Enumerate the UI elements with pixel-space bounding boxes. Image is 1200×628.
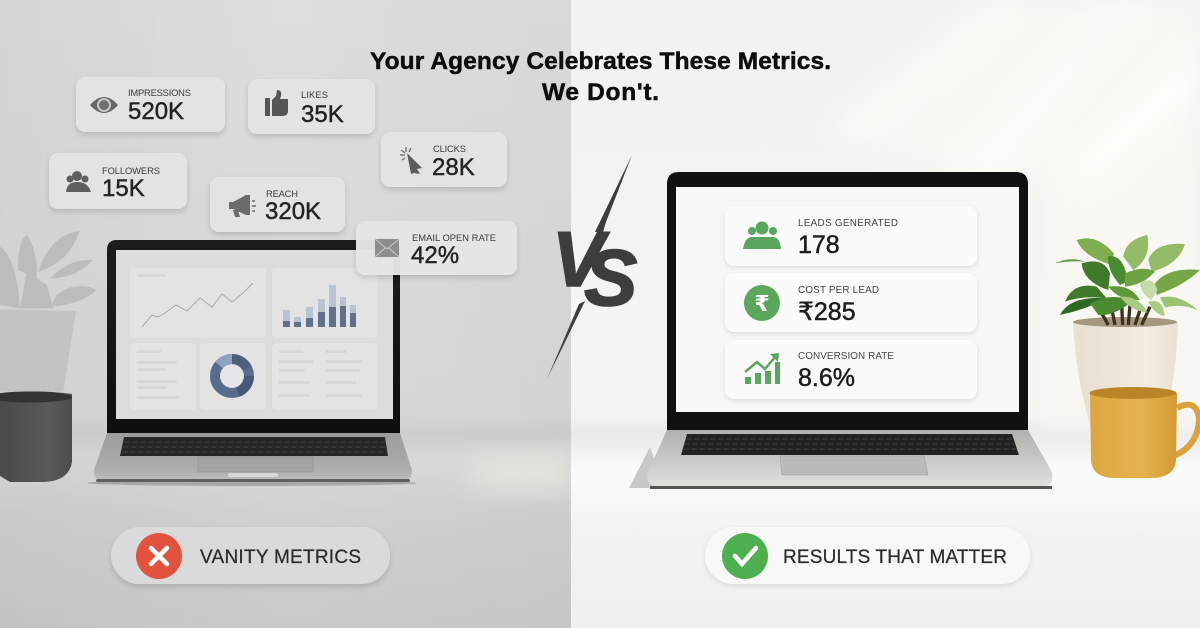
metric card: impressions: 520K xyxy=(128,98,184,125)
icon: rupee circle: ₹ xyxy=(754,291,770,316)
keyboard xyxy=(681,434,1019,455)
metric card: email open rate: EMAIL OPEN RATE xyxy=(412,232,496,243)
result card: cost per lead: COST PER LEAD xyxy=(798,285,879,296)
metric card: impressions: IMPRESSIONS xyxy=(128,87,191,98)
left laptop with muted dashboard xyxy=(87,240,417,486)
title xyxy=(370,48,831,106)
badge: vanity metrics: VANITY METRICS xyxy=(200,547,361,568)
dashboard list placeholders xyxy=(137,274,362,399)
title: We Don't. xyxy=(542,79,659,106)
metric card: likes: 35K xyxy=(301,101,344,128)
line chart xyxy=(142,283,253,327)
badge: vanity metrics xyxy=(111,527,390,584)
panel: right light background xyxy=(571,0,1200,628)
panel: left grey background xyxy=(0,0,571,628)
metric card: likes xyxy=(248,79,375,134)
icon: growth chart xyxy=(745,353,780,384)
bar chart xyxy=(283,285,356,327)
metric card: clicks: 28K xyxy=(432,154,475,181)
icon: green check xyxy=(722,533,768,579)
result card: conversion rate xyxy=(725,340,977,399)
metric card: reach: 320K xyxy=(265,198,321,225)
left plant silhouette xyxy=(0,231,97,392)
icon: thumbs up xyxy=(265,90,288,116)
title: Your Agency Celebrates These Metrics. xyxy=(370,48,831,75)
metric card: followers: FOLLOWERS xyxy=(102,165,160,176)
result card: cost per lead: ₹285 xyxy=(798,298,856,326)
metric card: clicks xyxy=(381,132,507,187)
icon: envelope xyxy=(375,239,399,257)
result card: conversion rate: 8.6% xyxy=(798,364,855,392)
badge: results that matter: RESULTS THAT MATTER xyxy=(783,547,1007,568)
metric card: followers: 15K xyxy=(102,175,145,202)
icon: green people xyxy=(743,222,781,249)
result card: conversion rate: CONVERSION RATE xyxy=(798,351,894,362)
metric card: email open rate xyxy=(356,221,517,275)
icon: red cross xyxy=(136,533,182,579)
result card: leads generated: 178 xyxy=(798,231,840,259)
keyboard xyxy=(120,437,388,456)
dashboard panels xyxy=(130,268,377,410)
metric card: clicks: CLICKS xyxy=(433,143,466,154)
metric card: reach xyxy=(210,177,345,232)
right plant in pot xyxy=(1055,235,1200,432)
result card: leads generated xyxy=(725,206,977,266)
result card: leads generated: LEADS GENERATED xyxy=(798,218,898,229)
icon: rupee circle xyxy=(744,285,780,321)
VS divider xyxy=(547,155,637,379)
metric card: reach: REACH xyxy=(266,188,298,199)
icon: people xyxy=(66,171,91,192)
VS divider: S xyxy=(584,233,637,322)
VS divider: V xyxy=(552,215,610,303)
metric card: likes: LIKES xyxy=(301,89,328,100)
icon: eye xyxy=(90,97,118,113)
right yellow mug xyxy=(1090,387,1199,478)
donut chart xyxy=(215,359,249,393)
icon: cursor click xyxy=(400,147,422,174)
metric card: followers xyxy=(49,153,187,209)
metric card: impressions xyxy=(76,77,225,132)
right laptop xyxy=(629,172,1052,489)
left dark mug xyxy=(0,392,72,482)
result card: cost per lead xyxy=(725,273,977,332)
metric card: email open rate: 42% xyxy=(411,242,459,269)
icon: megaphone xyxy=(229,195,256,217)
badge: results that matter xyxy=(705,527,1030,584)
